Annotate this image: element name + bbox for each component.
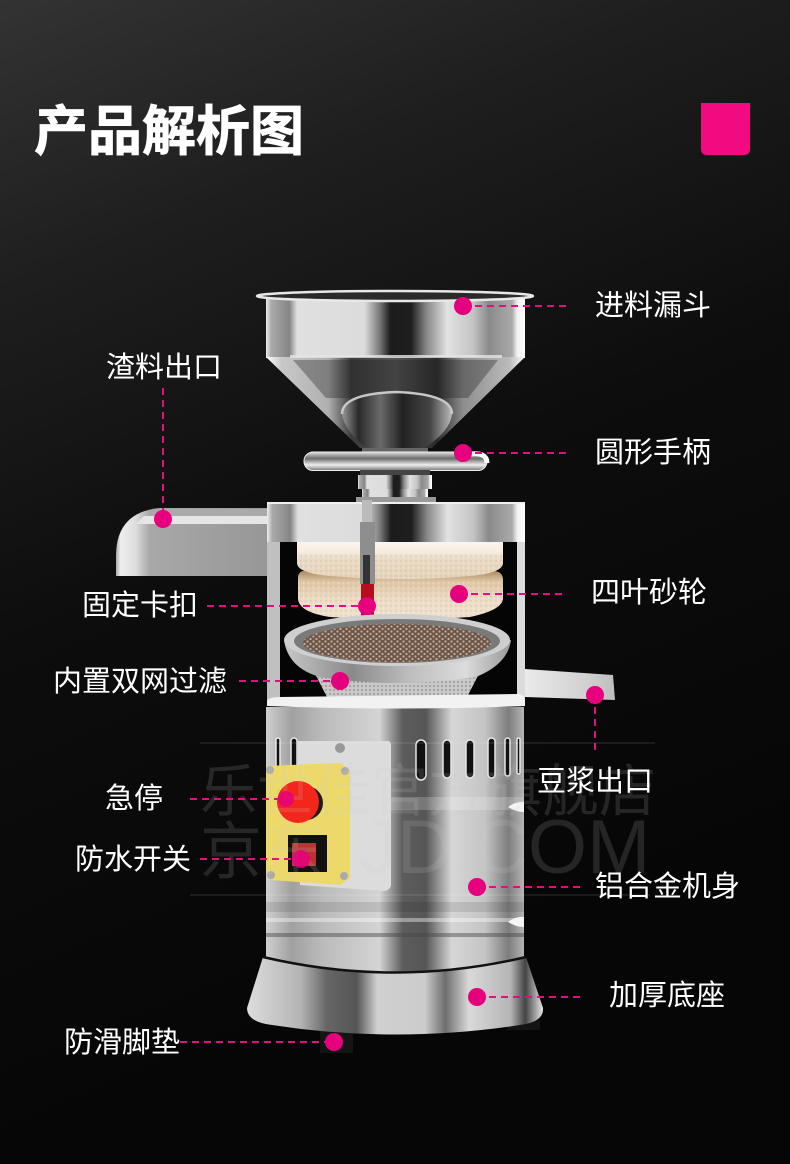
- callout: 防水开关: [75, 843, 310, 876]
- callout: 急停: [105, 782, 294, 815]
- bean milk spout: [525, 669, 615, 700]
- callout: 内置双网过滤: [53, 665, 349, 698]
- residue chute: [116, 508, 268, 576]
- handle ring: [304, 452, 487, 470]
- callout: 四叶砂轮: [450, 576, 707, 609]
- main body: [266, 707, 524, 977]
- callout: 防滑脚垫: 防滑脚垫: [64, 1026, 180, 1059]
- watermark: 京东: [200, 818, 324, 887]
- watermark: [200, 760, 656, 890]
- title: 产品解析图: [34, 102, 304, 162]
- grinding wheels: [297, 542, 503, 620]
- waterproof switch: [288, 835, 327, 872]
- callout: 加厚底座: [468, 979, 725, 1012]
- callout: 豆浆出口: 豆浆出口: [537, 765, 653, 798]
- callout: 内置双网过滤: 内置双网过滤: [53, 665, 227, 698]
- callout: 防水开关: 防水开关: [75, 843, 191, 876]
- watermark: JD.COM: [359, 805, 650, 890]
- watermark: 乐世佳官方旗舰店: [200, 760, 656, 824]
- emergency stop button: [277, 781, 323, 823]
- icon: pink tab: [701, 103, 750, 155]
- callout: 豆浆出口: [537, 686, 653, 798]
- fixing clip: [360, 500, 375, 622]
- machine: soybean grinder: [116, 291, 615, 1053]
- callout: 防滑脚垫: [64, 1026, 343, 1059]
- callout: 进料漏斗: 进料漏斗: [595, 289, 711, 322]
- callout: 加厚底座: 加厚底座: [609, 979, 725, 1012]
- control box: [266, 741, 391, 891]
- callout: 急停: 急停: [105, 782, 163, 815]
- housing: [267, 502, 525, 702]
- callout: 渣料出口: 渣料出口: [106, 351, 222, 384]
- callout: 铝合金机身: [468, 870, 740, 903]
- vent slots: [276, 738, 520, 780]
- callout: 固定卡扣: 固定卡扣: [82, 589, 198, 622]
- funnel: [257, 291, 533, 453]
- callout: 圆形手柄: 圆形手柄: [595, 436, 711, 469]
- callout: 固定卡扣: [82, 589, 376, 622]
- callout: 进料漏斗: [454, 289, 711, 322]
- neck: [356, 470, 436, 503]
- callout: 渣料出口: [106, 351, 222, 528]
- filter: [284, 614, 511, 699]
- watermark rules: [190, 743, 655, 895]
- base: [247, 957, 543, 1053]
- callout: 铝合金机身: 铝合金机身: [595, 870, 740, 903]
- callout: 四叶砂轮: 四叶砂轮: [591, 576, 707, 609]
- callout: 圆形手柄: [454, 436, 711, 469]
- lid rim between sections: [267, 694, 525, 708]
